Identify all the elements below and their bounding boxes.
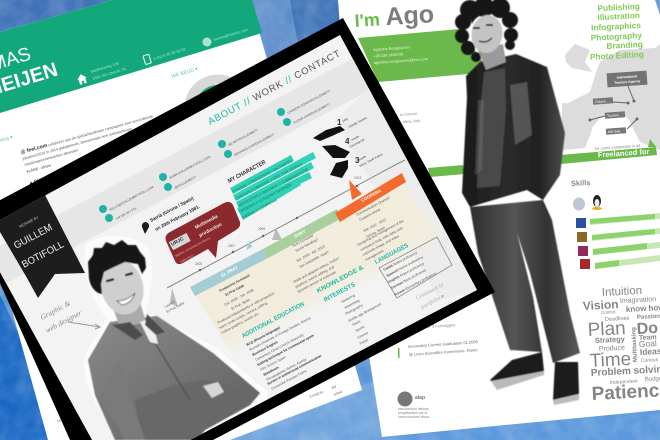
logo: aiap: associazione italiana xyxy=(398,407,429,411)
sheet body text: FLÄRE - afnow xyxy=(26,163,52,174)
name heading: Ago xyxy=(385,0,435,31)
skills heading: Skills xyxy=(571,178,591,188)
word cloud: Strategy xyxy=(595,334,626,345)
left column text: Culturale, 3 Formaggine xyxy=(415,323,456,330)
callout: dark red education box: 2006-2010 xyxy=(180,253,194,264)
email text: thomas@mijnsite.com xyxy=(213,28,248,42)
curly hair xyxy=(455,0,518,62)
experience blocks: El Prat Cable xyxy=(166,301,185,314)
services list: Publishing xyxy=(597,1,640,13)
neck xyxy=(478,44,506,70)
map silhouettes with durations: year xyxy=(342,117,349,123)
left column text: xxxx xyxy=(405,138,413,143)
callout: dark red education box: Audiovisual and xyxy=(188,200,224,223)
contact text: +34 636 287 576 xyxy=(115,206,137,221)
education text: Secondary Current Graduation 01.2006 xyxy=(408,339,479,349)
green strip with freelanced for: for some companies in all xyxy=(595,143,640,151)
experience blocks: Spanish version of corporate xyxy=(297,270,337,294)
character tags: ORDERED // CONSTANT WORKER xyxy=(239,183,293,214)
experience blocks: Sony Computer xyxy=(292,233,315,248)
additional education: Screen in audiovisual communication xyxy=(267,354,322,386)
map callouts: Tourism xyxy=(607,113,619,118)
ribbon: name: RESUME BY xyxy=(19,215,40,229)
additional education: Editing technique for commercial spots xyxy=(257,333,315,367)
callout: dark red education box: URJC xyxy=(170,236,185,248)
experience blocks: Mar. 2011 - 2012 xyxy=(363,217,387,233)
skills label: WE BEUD ▾ xyxy=(171,66,199,80)
folded arm xyxy=(136,382,258,423)
map callouts: Tourism Agency xyxy=(614,79,641,85)
additional education xyxy=(241,300,322,391)
map silhouettes with durations: Bucci, South Korea xyxy=(359,152,383,168)
map silhouettes with durations: month xyxy=(351,134,360,142)
map silhouettes with durations: 4 xyxy=(345,137,350,146)
education text: @ Liceo Scientifico Kornemone, Rome xyxy=(409,347,478,357)
services list: Branding xyxy=(606,39,643,51)
services list xyxy=(590,1,644,62)
continues in portfolio note: portfolio ▸ xyxy=(419,292,446,311)
word cloud: Curious xyxy=(641,357,659,364)
contact text: LINKEDIN.COM/IN/GUILLEMBOTI xyxy=(287,89,331,115)
word cloud: Intuition xyxy=(602,285,642,299)
word cloud: Produce xyxy=(599,345,625,353)
timeline bars xyxy=(190,173,406,296)
cream timeline panel xyxy=(195,183,446,360)
logo: aiap: comunicazione visiva xyxy=(398,415,429,419)
left column text xyxy=(400,112,456,330)
additional education: Filmakademie Vienna, Austria xyxy=(266,357,307,382)
contact text: BE.NET/GUILLEMBOTI xyxy=(228,128,259,147)
map silhouettes with durations: 3 xyxy=(355,156,360,165)
services list: Photo Editing xyxy=(590,49,644,62)
neck xyxy=(114,304,146,326)
icon: apple xyxy=(573,198,585,210)
contact text: agostino.bongiovanni@fmc.com xyxy=(374,57,428,65)
left column text: Laurea Brera xyxy=(412,322,435,328)
leather jacket xyxy=(462,54,565,207)
additional education: Russian University of Foreign Studies, Russia xyxy=(249,316,311,352)
handwritten tagline xyxy=(41,301,81,332)
timeline axis: 2005 xyxy=(195,262,202,266)
languages: LANGUAGES xyxy=(374,242,410,266)
experience blocks: graphics, sound, editing, and xyxy=(295,265,335,289)
timeline axis: 2007 xyxy=(228,244,235,248)
experience blocks: team; wrote scripts, camera, editing, xyxy=(219,301,269,330)
jacket highlights xyxy=(510,82,532,145)
experience blocks: Social Handling? xyxy=(295,237,319,253)
timeline bars: COOPERA xyxy=(360,188,383,203)
knowledge and interests: INTERESTS xyxy=(323,281,357,304)
sheet body text: jobsdoor/2014 in 2014 globaleknols. Denominatie heel websitedesign xyxy=(21,127,132,161)
continues in portfolio note: Continues in xyxy=(415,282,445,302)
sheet body text: fotodesignen/ontwerken afkonden xyxy=(24,148,79,167)
word cloud: Multitasking xyxy=(631,327,639,362)
tee xyxy=(140,318,158,344)
shirt inset xyxy=(477,68,506,188)
birthplace text: on 20th February 1981. xyxy=(154,204,201,232)
green strip with freelanced for xyxy=(428,139,657,177)
map silhouettes with durations xyxy=(313,116,383,178)
callout: dark red education box: production xyxy=(198,222,223,239)
lower sheet text: dry xyxy=(331,384,337,390)
knowledge and interests: Photography xyxy=(345,303,364,316)
lower sheet text: orked xyxy=(333,390,343,397)
software icons xyxy=(576,218,590,269)
languages: English Expert proficiency xyxy=(388,261,425,284)
eyes and smile xyxy=(473,24,493,42)
word cloud: Time xyxy=(589,349,632,372)
services list: Illustration xyxy=(597,10,640,22)
additional education: ADDITIONAL EDUCATION xyxy=(241,300,306,340)
knowledge and interests: Sports xyxy=(355,325,365,333)
map callouts: MK Italy xyxy=(608,129,621,134)
map silhouettes with durations: Coventry/UK xyxy=(349,137,365,149)
callout: dark red education box xyxy=(166,200,240,264)
lower sheet text xyxy=(57,384,343,423)
word cloud: Team xyxy=(639,334,657,342)
logo: aiap: aiap xyxy=(415,395,425,401)
word cloud: Passion xyxy=(637,314,660,321)
timeline axis xyxy=(167,160,405,307)
experience blocks: Coopera Group xyxy=(359,207,381,222)
experience blocks: motion graphics, sound, etc. xyxy=(221,311,260,335)
birthplace text xyxy=(149,195,201,232)
map silhouettes with durations: Oviedo, Austria xyxy=(348,116,368,129)
icon: house xyxy=(76,73,88,85)
languages: Spanish Native proficiency xyxy=(386,255,424,278)
map silhouettes with durations: 1 xyxy=(337,118,342,127)
contact text: @GUILLEMBOTI xyxy=(174,175,197,190)
experience blocks: El Prat Cable xyxy=(225,283,245,297)
sheet body text: @ feel.com collaborer aan de opdrachtsoftware campagnes voor verschillende xyxy=(20,113,154,156)
jeans xyxy=(470,200,580,363)
knowledge and interests: Advertising xyxy=(344,298,360,310)
panel: right resume sheet xyxy=(338,0,660,437)
skill bars xyxy=(590,213,660,269)
services list: Infographics xyxy=(591,20,641,33)
sheet body text: ● SU xyxy=(29,178,42,187)
experience blocks: El Prat, Spain xyxy=(231,298,251,311)
word cloud: Imagination xyxy=(620,296,656,305)
navigation heading: ABOUT // WORK // CONTACT xyxy=(206,48,343,128)
sticker outline of man xyxy=(190,398,268,440)
word cloud xyxy=(582,285,660,405)
contact text: WWW.GUILLEMBOTIFOLL.COM xyxy=(169,155,212,180)
additional education: B1@ (Russia language) xyxy=(246,326,281,347)
placket xyxy=(155,343,190,400)
word cloud: Plan xyxy=(587,318,626,341)
address text: Stadhuisweg 108 xyxy=(90,62,119,74)
contact text xyxy=(109,89,331,221)
services list: Photography xyxy=(590,30,642,43)
experience blocks: management. xyxy=(365,249,385,262)
sheet body text xyxy=(20,113,154,187)
ribbon: name: GUILLEM xyxy=(12,222,54,252)
knowledge and interests: Marketing xyxy=(341,293,356,304)
green strip with freelanced for: Freelanced for xyxy=(598,147,650,159)
timeline bars: SONY xyxy=(293,229,307,239)
knowledge and interests: KNOWLEDGE & xyxy=(316,264,365,295)
donut chart xyxy=(190,80,246,136)
experience blocks: company's blog, web video and xyxy=(360,226,403,252)
word cloud: Vision xyxy=(582,297,619,313)
map of Europe xyxy=(562,44,660,150)
shoes xyxy=(490,352,579,405)
map callouts xyxy=(588,71,647,135)
word cloud: Goal xyxy=(639,338,657,349)
experience blocks: Production Assistant xyxy=(219,273,251,293)
character tags: CURIOUS // CREATIVE // FEEL FOR DETAILS xyxy=(235,162,304,201)
character tags: FRIENDLY // EMPATHIC xyxy=(242,198,279,220)
left column text: ro Director xyxy=(400,112,418,117)
contact text: BEHANCE.COM/GUILLEMBOTI xyxy=(234,132,275,157)
birthplace text: Sarrià (Girona / Spain) xyxy=(149,195,195,223)
logo: aiap: progettazione per la xyxy=(398,411,427,415)
word cloud: Deadlines xyxy=(605,316,630,323)
character tags xyxy=(230,152,316,220)
knowledge and interests: Cinema xyxy=(357,331,369,340)
additional education: Universitat Pompeu Fabra xyxy=(271,369,307,391)
additional education: Film School, Spain xyxy=(260,355,287,372)
left column text: nbrai, Italy xyxy=(403,119,421,124)
contact text: FLICKR.COM/GUILLEMBOTI xyxy=(293,102,331,125)
my character heading: MY CHARACTER xyxy=(227,159,268,185)
continues in portfolio note xyxy=(416,284,444,310)
contact icons xyxy=(99,108,291,222)
map callouts: International xyxy=(617,74,637,80)
handwritten tagline: web designer xyxy=(44,308,83,335)
word cloud: Control xyxy=(601,309,616,315)
grey band xyxy=(0,58,370,284)
icon: phone xyxy=(143,54,151,65)
contact text xyxy=(373,44,428,65)
experience blocks xyxy=(164,196,404,335)
name heading: I'm xyxy=(354,9,380,31)
spiky hair xyxy=(88,240,146,294)
experience blocks: Girona, Spain xyxy=(366,226,386,239)
word cloud: Independent xyxy=(610,379,638,386)
experience blocks: Designing and management of the xyxy=(357,219,404,247)
knowledge and interests: Mobile app development xyxy=(348,302,382,323)
contact text: +39 339 3460740 xyxy=(373,52,403,58)
timeline axis: 2013 xyxy=(354,176,361,180)
ribbon: name xyxy=(0,195,85,298)
character tags: RESOLUTIVE // SOCIABLE // COMMUNICATIVE xyxy=(238,167,310,208)
eyes and smile xyxy=(106,272,135,305)
word cloud: Do xyxy=(636,320,659,338)
face xyxy=(100,261,144,315)
panel: black framed centre resume xyxy=(0,18,495,440)
callout: dark red education box: Madrid, Universitat de Girona xyxy=(175,236,211,258)
phone text: (+31) 6 40 39 59 92 xyxy=(153,47,186,61)
lower sheet text: Ul. xyxy=(57,419,61,423)
additional education: Steadicam xyxy=(263,365,279,377)
face xyxy=(469,13,505,55)
lower sheet text: Cortazzo xyxy=(309,390,324,399)
address text: 2491 DG Utrecht, NL xyxy=(92,67,127,81)
ribbon: name: BOTIFOLL xyxy=(20,239,66,271)
experience blocks: Apr. 2009 - Apr. 2010 xyxy=(296,244,326,263)
map silhouettes with durations: month xyxy=(358,154,367,162)
experience blocks: Produced independently or with production xyxy=(217,291,275,325)
address text xyxy=(90,62,127,81)
callout: dark red education box: Multimedia xyxy=(194,214,219,231)
collar xyxy=(112,314,165,340)
experience blocks: Made and adapted videos, motion xyxy=(293,256,340,284)
figure: standing man in leather jacket xyxy=(455,0,580,405)
knowledge and interests: Music xyxy=(352,319,362,327)
handwritten tagline: Graphic & xyxy=(39,298,72,322)
knowledge and interests: Travel xyxy=(359,338,369,346)
timeline bars: EL PRAT xyxy=(220,265,239,278)
map callouts: Chianti xyxy=(595,99,606,104)
lighter side panel xyxy=(369,89,477,292)
shirt xyxy=(88,316,260,440)
experience blocks: San Sebastián, Spain xyxy=(299,250,329,269)
languages: Korean Elementary proficiency xyxy=(394,271,437,297)
logo: aiap xyxy=(398,392,429,419)
contact text: Agostino Bongiovanni xyxy=(373,45,410,52)
timeline axis: 2009 xyxy=(258,227,265,231)
additional education: Canterbury Christ Church University xyxy=(255,333,305,362)
languages: Català Native proficiency xyxy=(383,250,418,272)
icon: email circle xyxy=(202,38,212,46)
name heading xyxy=(354,0,435,33)
contact text: HELLO@GUILLEMBOTIFOLL.COM xyxy=(109,185,155,212)
knowledge and interests xyxy=(316,264,382,346)
character tags: DYNAMIC // PASSIONATE // MOTIVATED xyxy=(232,159,293,194)
panel: left resume sheet xyxy=(0,0,362,440)
fringe xyxy=(470,9,501,24)
icon: linux xyxy=(592,195,602,210)
header band green xyxy=(358,29,490,82)
additional education: Business English xyxy=(252,340,278,357)
icon: location pin xyxy=(142,222,149,234)
sketched arrow xyxy=(68,322,100,329)
languages: German Basic proficiency xyxy=(391,268,427,290)
education text xyxy=(408,339,479,357)
experience blocks: Oct. 2006 - Jan. 2008 xyxy=(224,288,254,307)
experience blocks: Communication Channel xyxy=(356,196,390,217)
figure: smiling man with crossed arms xyxy=(88,240,260,440)
languages xyxy=(374,237,452,298)
hand xyxy=(203,382,224,398)
experience blocks: Launch xyxy=(164,300,175,309)
experience blocks: corporate image, and video xyxy=(362,234,400,257)
header band green xyxy=(0,0,262,113)
